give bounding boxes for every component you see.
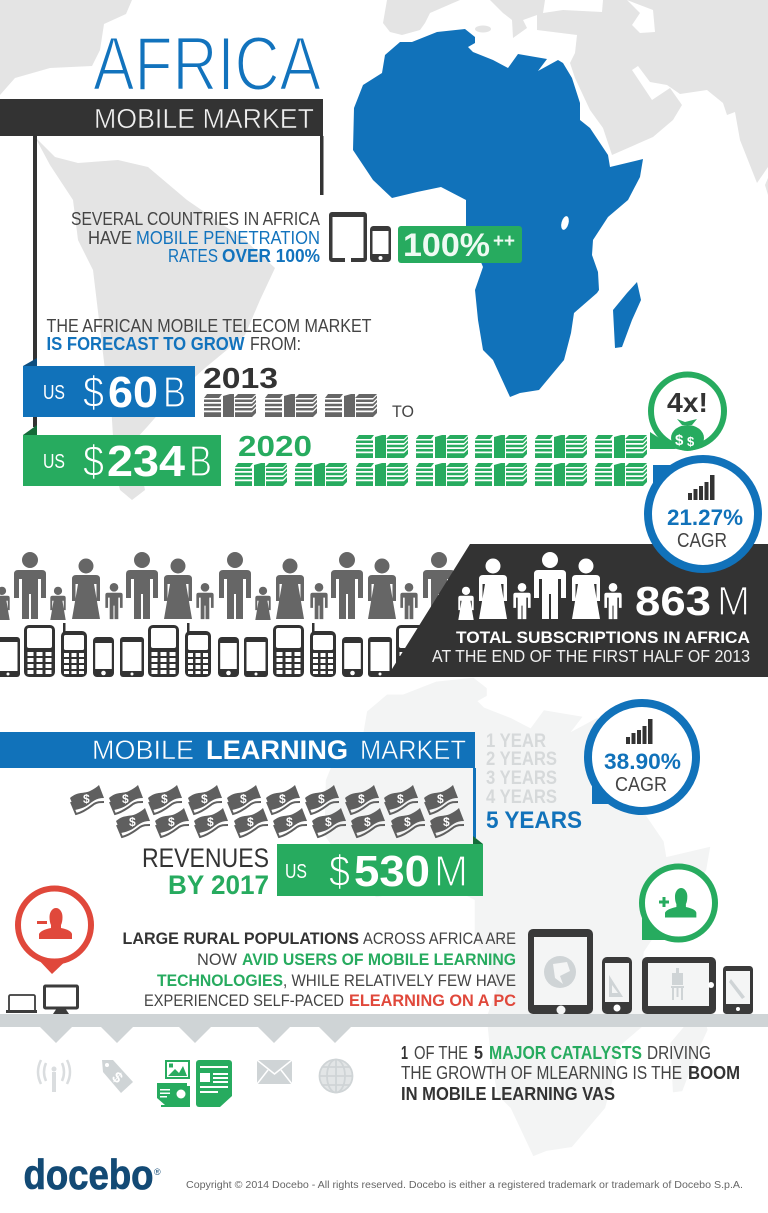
panel: total subscriptions: M (717, 578, 750, 624)
title: AFRICA (93, 22, 321, 107)
icon: signal antenna (38, 1060, 70, 1092)
icon: devices (528, 929, 753, 1014)
text block: mobile penetration: RATES (168, 246, 218, 266)
value box: US $530M (277, 836, 483, 896)
callout: 38.90% CAGR: CAGR (615, 774, 667, 796)
heading bar: mobile learning market: MARKET (360, 735, 466, 765)
panel: title bar (0, 99, 324, 366)
value box: US $234B: 234 (107, 437, 186, 486)
callout: 4x (650, 374, 724, 451)
icon: green VAS content (157, 1060, 232, 1107)
text block: rural populations (122, 929, 516, 1010)
text block: rural populations: ELEARNING ON A PC (349, 991, 516, 1010)
panel: total subscriptions (387, 544, 768, 677)
text block: rural populations: , WHILE RELATIVELY FEW HAVE (283, 971, 516, 990)
text block: rural populations: TECHNOLOGIES (157, 971, 283, 990)
text block: mobile penetration: MOBILE PENETRATION (136, 228, 320, 248)
heading bar: mobile learning market: LEARNING (206, 735, 348, 765)
map of Africa (353, 29, 643, 397)
value box: US $530M: $ (329, 847, 350, 896)
text block: catalysts: THE GROWTH OF MLEARNING IS THE (401, 1063, 682, 1083)
icon: growth bars (688, 475, 714, 500)
value box: US $530M: M (434, 847, 468, 896)
text block: catalysts: BOOM (688, 1063, 740, 1083)
logo: docebo: ® (154, 1167, 161, 1177)
icon: money bag: $ (675, 432, 684, 449)
icon: envelope (257, 1060, 292, 1084)
footer: copyright: Copyright © 2014 Docebo - All rights reserved. Docebo is either a registered trademark or trademark of Docebo S.p.A. (186, 1179, 743, 1191)
text block: forecast intro: FROM: (250, 334, 301, 354)
text block: rural populations: LARGE RURAL POPULATIONS (122, 929, 359, 948)
value box: US $234B: $ (83, 437, 104, 486)
list: years: 5 YEARS (486, 807, 582, 834)
value box: US $60B: 60 (108, 368, 158, 417)
value box: US $530M: US (285, 861, 307, 883)
list: years: 2 YEARS (486, 749, 557, 770)
icon: globe (320, 1060, 352, 1092)
panel: total subscriptions: TOTAL SUBSCRIPTIONS IN AFRICA (456, 628, 750, 647)
icon: laptop and monitor (6, 986, 78, 1014)
text block: rural populations: NOW (197, 950, 237, 969)
callout: 38.90% CAGR: 38.90% (604, 749, 681, 774)
badge: 100%++ (398, 226, 522, 263)
value box: US $234B: B (189, 437, 212, 486)
text block: mobile penetration: HAVE (88, 228, 132, 248)
text block: forecast intro: THE AFRICAN MOBILE TELECOM MARKET (46, 316, 372, 336)
callout: green add user (642, 866, 715, 940)
text block: mobile penetration: OVER 100% (222, 246, 320, 266)
text block: forecast intro (46, 316, 372, 354)
icon: money bag (671, 419, 704, 451)
value box: US $530M: 530 (354, 847, 430, 896)
heading: 2020: 2020 (238, 431, 312, 463)
icon: growth bars (626, 719, 652, 744)
callout: 4x: 4x! (667, 387, 708, 418)
text block: catalysts: MAJOR CATALYSTS (489, 1043, 642, 1063)
value box: US $60B: B (163, 368, 186, 417)
badge: 100%++: 100% (403, 227, 490, 263)
callout: 38.90% CAGR (588, 703, 696, 811)
divider band with pointers (0, 1014, 768, 1043)
background: faint Africa (324, 678, 710, 1156)
list: years: 1 YEAR (486, 731, 546, 752)
text block: rural populations: AVID USERS OF MOBILE LEARNING (242, 950, 516, 969)
panel: title bar: MOBILE MARKET (94, 103, 314, 134)
value box: US $60B: US (43, 382, 65, 404)
text block: revenues by 2017: BY 2017 (168, 870, 269, 900)
text block: mobile penetration: SEVERAL COUNTRIES IN AFRICA (71, 209, 320, 229)
background: world map (0, 0, 768, 500)
value box: US $60B (23, 358, 195, 417)
heading bar: mobile learning market (0, 732, 476, 838)
list: years: 3 YEARS (486, 768, 557, 789)
panel: total subscriptions: 863 (635, 578, 711, 624)
label: to: TO (392, 402, 414, 421)
people row (0, 552, 455, 620)
value box: US $234B (23, 417, 221, 486)
phones row (0, 623, 427, 677)
list: years (486, 731, 582, 834)
icon: money bag: $ (687, 434, 695, 449)
pin: red minus user (18, 888, 91, 974)
text block: catalysts: OF THE (414, 1043, 468, 1063)
text block: revenues by 2017 (142, 843, 269, 900)
icons: banknotes (70, 785, 464, 837)
text block: rural populations: EXPERIENCED SELF-PACED (144, 991, 344, 1010)
callout: 21.27% CAGR (648, 459, 758, 569)
callout: 21.27% CAGR: CAGR (677, 530, 727, 552)
icons: 2013 money stacks (204, 394, 377, 417)
text block: catalysts: IN MOBILE LEARNING VAS (401, 1084, 615, 1104)
text block: forecast intro: IS FORECAST TO GROW (46, 334, 245, 354)
text block: catalysts: 1 (401, 1043, 408, 1063)
icon: tablet and phone (329, 212, 391, 262)
callout: 21.27% CAGR: 21.27% (667, 505, 743, 530)
icon: white family (458, 552, 622, 620)
heading: 2013: 2013 (203, 363, 278, 395)
value box: US $234B: US (43, 451, 65, 473)
text block: catalysts: 5 (474, 1043, 483, 1063)
text block: rural populations: ACROSS AFRICA ARE (363, 929, 516, 948)
list: years: 4 YEARS (486, 787, 557, 808)
icon: price tag: $ (108, 1069, 126, 1087)
badge: 100%++: ++ (493, 231, 515, 252)
text block: mobile penetration (71, 209, 320, 266)
icon: price tag (102, 1060, 133, 1093)
text block: revenues by 2017: REVENUES (142, 843, 269, 873)
heading bar: mobile learning market: MOBILE (92, 735, 194, 765)
icons: 2020 money stacks (235, 435, 647, 486)
text block: catalysts (401, 1043, 740, 1104)
text block: catalysts: DRIVING (647, 1043, 711, 1063)
value box: US $60B: $ (83, 368, 104, 417)
logo: docebo: docebo (24, 1151, 154, 1198)
